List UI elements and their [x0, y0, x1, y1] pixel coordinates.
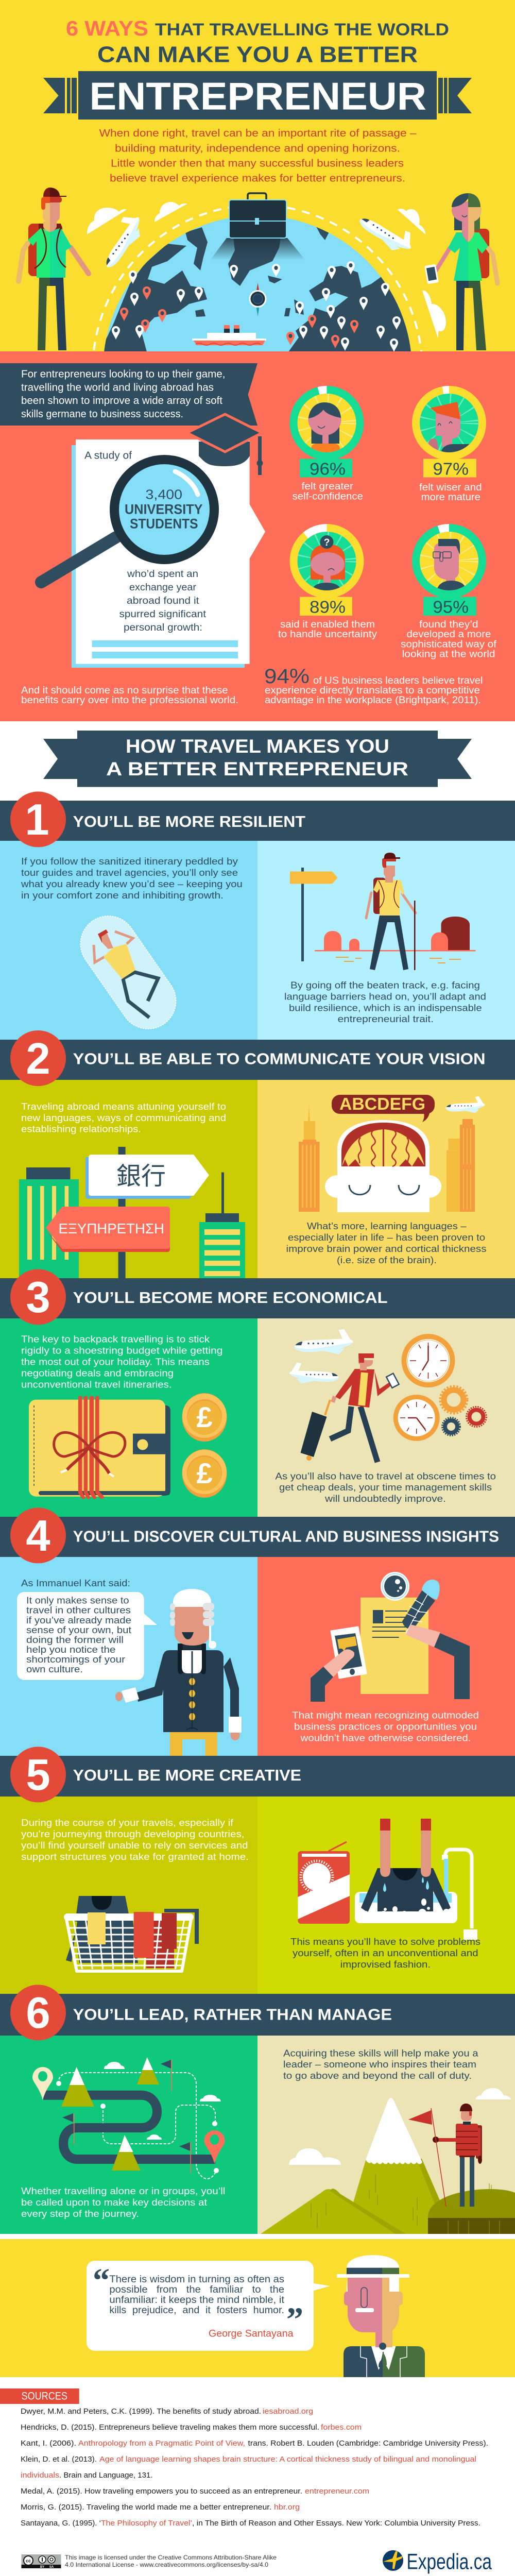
icon: signpost [290, 868, 338, 961]
stat: 89% uncertainty: to handle uncertainty [278, 629, 377, 640]
source list: forbes.com [321, 2423, 362, 2432]
Kant speech bubble [17, 1592, 157, 1680]
source list: hbr.org [274, 2503, 300, 2512]
license text: This image is licensed under the Creative Commons Attribution-Share Alike [65, 2554, 277, 2561]
quote bubble [87, 2261, 330, 2351]
section 5 header: YOU’LL BE MORE CREATIVE [73, 1766, 301, 1784]
flags [62, 2060, 191, 2173]
section 6 right text: Acquiring these skills will help make you a [283, 2048, 479, 2059]
section 6 header [0, 1985, 515, 2040]
Kant speech bubble: shortcomings of your [26, 1654, 125, 1665]
graduation cap [187, 414, 263, 475]
source list: Dwyer, M.M. and Peters, C.K. (1999). The benefits of study abroad. [21, 2407, 261, 2416]
icon: gears [440, 1386, 486, 1435]
section 5 right text [290, 1937, 480, 1970]
globe illustration [16, 188, 500, 351]
title line 1: THAT TRAVELLING THE WORLD [155, 20, 449, 39]
icon: businessman running with suitcase [301, 1353, 399, 1462]
stat: 95% sophisticated [401, 528, 497, 660]
icon: head with brain [325, 1120, 441, 1212]
icon: plane [445, 1096, 485, 1113]
Kant speech bubble: travel in other cultures [26, 1605, 131, 1616]
section 1 right text [284, 980, 486, 1024]
icon: laundry basket [64, 1896, 199, 1971]
section 4: insights [0, 1507, 515, 1756]
Kant intro: As Immanuel Kant said: [21, 1578, 130, 1588]
section 5 left text: you’re journeying through developing countries, [21, 1829, 244, 1839]
flag [408, 2108, 446, 2207]
section 3 header [0, 1269, 515, 1325]
section 6 right text: leader – someone who inspires their team [283, 2059, 476, 2070]
section 3 right text: get cheap deals, your time management skills [279, 1482, 492, 1493]
study paper: abroad found it [127, 596, 199, 606]
section 6 right text: to go above and beyond the call of duty. [283, 2071, 472, 2081]
icon: buildings [19, 1147, 245, 1278]
section 1 left text: in your comfort zone and inhibiting growth. [21, 890, 224, 901]
section 2 header: YOU’LL BE ABLE TO COMMUNICATE YOUR VISION [73, 1050, 486, 1067]
intro paragraph: When done right, travel can be an important rite of passage – [99, 128, 417, 139]
sign: bank in Chinese [85, 1155, 209, 1199]
stat: 96% self-confidence: 96% [310, 460, 346, 478]
section 3 left text: The key to backpack travelling is to stick [21, 1334, 210, 1345]
source list: The Philosophy of Travel’ [101, 2519, 192, 2528]
section 3 left text: unconventional travel itineraries. [21, 1380, 172, 1390]
pins [32, 2067, 225, 2164]
section 4 right text: That might mean recognizing outmoded [292, 1710, 479, 1721]
yellow background [0, 2239, 515, 2377]
Expedia logo [383, 2549, 492, 2574]
section 6 left text: every step of the journey. [21, 2209, 139, 2219]
Kant speech bubble: if you’ve already made [26, 1615, 131, 1625]
source list: iesabroad.org [263, 2407, 313, 2416]
bottom note: benefits carry over into the professional world. [21, 694, 238, 706]
section 5 right text: improvised fashion. [340, 1959, 431, 1970]
icon: hiker [366, 853, 416, 970]
section 1 right text: build resilience, which is an indispensable [289, 1003, 482, 1013]
section 2: communicate [0, 1030, 515, 1278]
stat: 94%: 94% [264, 665, 310, 688]
section 4 panels [0, 1557, 515, 1756]
icon: wallet tied with ribbon [29, 1396, 170, 1499]
intro callout: skills germane to business success. [21, 409, 183, 420]
section 5 left text: support structures you take for granted at home. [21, 1852, 249, 1862]
section 4 header: YOU’LL DISCOVER CULTURAL AND BUSINESS INSIGHTS [73, 1527, 499, 1545]
stat: 96% self-confidence: felt greater [302, 481, 354, 492]
stat: 89% uncertainty: said it enabled them [280, 619, 375, 630]
dashed flight arc [93, 206, 422, 351]
coral background [0, 351, 515, 721]
title line 2: CAN MAKE YOU A BETTER [97, 42, 418, 67]
stat: 95% sophisticated: 95% [433, 598, 469, 616]
icon: planes [289, 1329, 353, 1384]
source list: Kant, I. (2006). [21, 2439, 76, 2448]
section 6 left text: be called upon to make key decisions at [21, 2197, 207, 2208]
source list: Age of language learning shapes brain structure: A cortical thickness study of bilingual and monolingual [99, 2455, 476, 2464]
stat: 95% sophisticated: looking at the world [402, 649, 495, 660]
stat: 97% wiser: more mature [421, 492, 480, 503]
section 5 header: 5 [26, 1751, 50, 1800]
icon: man floating on lilo [70, 905, 187, 1040]
intro paragraph: Little wonder then that many successful business leaders [111, 158, 404, 169]
section 1 header: 1 [25, 795, 49, 844]
study paper: who’d spent an [127, 569, 198, 580]
title line 1 [66, 16, 449, 40]
sign: bank in Chinese: 銀行 [116, 1163, 166, 1190]
section 2 right text: improve brain power and cortical thickness [286, 1244, 486, 1254]
quote bubble: unfamiliar: it keeps the mind nimble, it [109, 2295, 285, 2306]
section 1 left text [21, 856, 243, 901]
quote bubble: There is wisdom in turning as often as [109, 2274, 284, 2285]
section 3 right text: As you’ll also have to travel at obscene times to [275, 1471, 496, 1482]
traveller: man [19, 188, 89, 350]
section 6 header: 6 [26, 1989, 50, 2038]
icon: hands with phone and quill [311, 1572, 470, 1702]
source list: trans. Robert B. Louden (Cambridge: Cambridge University Press). [248, 2439, 488, 2448]
stat: 97% wiser: felt wiser and [419, 482, 482, 493]
bottom note: And it should come as no surprise that these [21, 685, 228, 696]
sources heading: SOURCES [22, 2391, 67, 2402]
source list: entrepreneur.com [305, 2487, 369, 2496]
Kant speech bubble: own culture. [26, 1664, 83, 1674]
stat: 94%: experience directly translates to a competitive [265, 685, 480, 696]
section 3 right text: will undoubtedly improve. [324, 1494, 446, 1504]
icon: speech bubble alphabet [332, 1094, 435, 1122]
source list: Morris, G. (2015). Traveling the world made me a better entrepreneur. [21, 2503, 271, 2512]
stat: 89% uncertainty [278, 528, 377, 640]
section 6 panels [0, 2036, 515, 2234]
stat: 89% uncertainty: ? [324, 537, 330, 548]
section 6 header: YOU’LL LEAD, RATHER THAN MANAGE [73, 2006, 392, 2024]
section 4 right text: wouldn’t have otherwise considered. [300, 1733, 471, 1743]
heading banner: how travel makes you a better entrepreneur: HOW TRAVEL MAKES YOU [126, 736, 389, 757]
planes [93, 205, 418, 272]
compass [249, 283, 267, 316]
section 1 right text: language barriers head on, you’ll adapt and [284, 991, 486, 1002]
creative commons badge: cc [26, 2558, 31, 2564]
quote bubble: George Santayana [209, 2328, 294, 2340]
stat: 95% sophisticated: developed a more [407, 629, 491, 640]
section 2 right text [286, 1221, 486, 1265]
intro paragraph: building maturity, independence and opening horizons. [115, 143, 400, 155]
license text: 4.0 International License - www.creativecommons.org/licenses/by-sa/4.0 [65, 2561, 268, 2568]
Expedia logo: Expedia.ca [407, 2549, 492, 2574]
title banner: entrepreneur: ENTREPRENEUR [90, 74, 426, 117]
section 3: economical [0, 1269, 515, 1517]
section 3 header: YOU’LL BECOME MORE ECONOMICAL [73, 1289, 388, 1307]
section 6 right text [283, 2048, 479, 2081]
source list: Hendricks, D. (2015). Entrepreneurs believe traveling makes them more successful. [21, 2423, 319, 2432]
section 1 left text: tour guides and travel agencies, you’ll only see [21, 868, 238, 878]
section 3 right text [275, 1471, 496, 1504]
section 1 left text: If you follow the sanitized itinerary peddled by [21, 856, 238, 867]
large mountain [344, 2098, 444, 2234]
sign: service in Greek [46, 1207, 170, 1252]
study paper: personal growth: [124, 622, 202, 633]
section 3 panels [0, 1318, 515, 1517]
section 4 header: 4 [26, 1512, 50, 1561]
section 1 left text: what you already knew you’d see – keeping you [21, 879, 243, 889]
stat: 94%: advantage in the workplace (Brightpark, 2011). [265, 694, 481, 706]
hill [428, 2189, 515, 2234]
title line 1: 6 WAYS [66, 16, 148, 40]
source list: Anthropology from a Pragmatic Point of View, [78, 2439, 245, 2448]
section 6: lead [0, 1985, 515, 2234]
briefcase [210, 193, 305, 260]
icon: speech bubble alphabet: ABCDEFG [339, 1094, 425, 1113]
clouds [87, 202, 446, 337]
section 5 header [0, 1747, 515, 1802]
leader figure [433, 2104, 482, 2207]
source list: individuals [21, 2471, 59, 2480]
panel: quote [0, 2239, 515, 2377]
section 3 left text [21, 1334, 222, 1390]
quote bubble: ” [286, 2301, 303, 2338]
source list: Klein, D. et al. (2013). [21, 2455, 97, 2464]
section 2 right text: (i.e. size of the brain). [337, 1255, 437, 1265]
quote bubble: possible from the familiar to the [109, 2284, 284, 2295]
section 3 left text: the most out of your holiday. This means [21, 1357, 210, 1367]
section 2 left text [21, 1101, 226, 1134]
source list: Santayana, G. (1995). ‘ [21, 2519, 101, 2528]
portrait: George Santayana [337, 2255, 425, 2377]
sources heading [0, 2388, 79, 2404]
section 4 header [0, 1507, 515, 1563]
mountains [61, 2057, 159, 2171]
section 1: resilient [0, 791, 515, 1040]
icon: pound coins [182, 1393, 227, 1498]
creative commons badge: BY [40, 2566, 44, 2569]
section 2 right text: What’s more, learning languages – [307, 1221, 467, 1231]
magnifying glass: UNIVERSITY [125, 502, 203, 517]
traveller: woman [424, 193, 497, 350]
stat: 97% wiser: 97% [433, 460, 469, 478]
globe [104, 218, 411, 351]
icon: clocks [393, 1334, 455, 1441]
section 2 right text: especially later in life – has been proven to [288, 1232, 485, 1243]
stat: 89% uncertainty: 89% [310, 598, 346, 616]
section 5 left text: you’ll find yourself unable to rely on services and [21, 1840, 248, 1851]
section 6 left text [21, 2186, 226, 2219]
Kant speech bubble: doing the former will [26, 1635, 124, 1645]
intro callout: been shown to improve a wide array of soft [21, 395, 222, 406]
section 2 header: 2 [26, 1035, 50, 1083]
magnifying glass [41, 460, 214, 582]
quote bubble: “ [93, 2262, 110, 2299]
stat: 94% [264, 665, 483, 706]
icon: mountain scene with leader [261, 2088, 515, 2234]
section 4 right text [292, 1710, 479, 1743]
icon: obstacles [315, 917, 476, 963]
ship [192, 325, 266, 345]
continents [98, 225, 417, 355]
icon: pound coins: £ [196, 1401, 213, 1433]
stat: 95% sophisticated: sophisticated way of [401, 639, 497, 650]
stat: 95% sophisticated: found they’d [419, 619, 478, 630]
intro callout: For entrepreneurs looking to up their game, [21, 369, 226, 380]
icon: city buildings right [299, 1105, 475, 1212]
license text [65, 2554, 277, 2568]
section 2 left text: establishing relationships. [21, 1124, 141, 1134]
section 3 header: 3 [26, 1273, 50, 1322]
intro callout: travelling the world and living abroad has [21, 382, 214, 394]
Kant speech bubble: help you notice the [26, 1645, 115, 1655]
small mountain [261, 2189, 406, 2234]
section 2 header [0, 1030, 515, 1086]
title [43, 16, 472, 120]
source list: , in The Birth of Reason and Other Essays. New York: Columbia University Press. [192, 2519, 480, 2528]
icon: pound coins: £ [196, 1457, 213, 1489]
section 5 right text: This means you’ll have to solve problems [290, 1937, 480, 1947]
study paper: spurred significant [119, 609, 207, 620]
section 3 left text: negotiating deals and embracing [21, 1368, 174, 1379]
stat: 97% wiser [416, 389, 482, 503]
clouds [289, 2088, 511, 2165]
section 5 left text: During the course of your travels, especially if [21, 1818, 234, 1828]
section 2 left text: Traveling abroad means attuning yourself to [21, 1101, 226, 1112]
section 1 header [0, 791, 515, 847]
study paper: exchange year [129, 582, 197, 593]
section 1 right text: By going off the beaten track, e.g. facing [290, 980, 480, 990]
section 5 right text: yourself, often in an unconventional and [293, 1948, 478, 1958]
heading banner: how travel makes you a better entrepreneur [43, 731, 472, 787]
icon: Immanuel Kant [115, 1589, 242, 1756]
magnifying glass: STUDENTS [130, 516, 198, 532]
section 5: creative [0, 1747, 515, 1994]
intro paragraph: believe travel experience makes for better entrepreneurs. [110, 173, 405, 184]
title banner: entrepreneur [43, 71, 472, 120]
icon: washing clothes in sink [298, 1819, 477, 1940]
section 6 left text: Whether travelling alone or in groups, you’ll [21, 2186, 226, 2196]
Kant speech bubble: It only makes sense to [26, 1596, 129, 1606]
quote bubble: kills prejudice, and it fosters humor. [109, 2305, 284, 2316]
section 2 panels [0, 1080, 515, 1278]
icon: map road with mountains [32, 2057, 225, 2179]
heading banner: how travel makes you a better entrepreneur: A BETTER ENTREPRENEUR [106, 758, 408, 779]
map pins [112, 261, 401, 352]
intro paragraph [99, 128, 417, 184]
study paper: A study of [84, 450, 132, 462]
creative commons badge: SA [49, 2566, 54, 2569]
section 5 panels [0, 1797, 515, 1994]
clouds [104, 2062, 221, 2140]
section 3 left text: rigidly to a shoestring budget while getting [21, 1346, 222, 1356]
section 1 panels [0, 841, 515, 1040]
section 5 left text [21, 1818, 249, 1862]
Kant speech bubble: sense of your own, but [26, 1625, 131, 1635]
panel: sources [0, 2388, 492, 2574]
section 1 header: YOU’LL BE MORE RESILIENT [73, 812, 305, 831]
intro callout [0, 363, 258, 426]
section 1 right text: entrepreneurial trait. [338, 1014, 434, 1024]
stat: 96% self-confidence [293, 389, 363, 502]
dashed routes [58, 2073, 216, 2179]
creative commons badge [22, 2554, 61, 2569]
section 4 right text: business practices or opportunities you [294, 1722, 477, 1732]
sign: service in Greek: ΕΞΥΠΗΡΕΤΗΣΗ [59, 1221, 164, 1236]
source list: Medal, A. (2015). How traveling empowers you to succeed as an entrepreneur. [21, 2487, 302, 2496]
stat: 94%: of US business leaders believe travel [313, 675, 483, 686]
magnifying glass: 3,400 [145, 486, 182, 502]
source list: . Brain and Language, 131. [59, 2471, 152, 2480]
stat: 96% self-confidence: self-confidence [293, 492, 363, 502]
road [43, 2095, 215, 2159]
panel: soft skills [0, 351, 515, 721]
study paper [72, 439, 265, 668]
source list [21, 2407, 488, 2528]
section 2 left text: new languages, ways of communicating and [21, 1113, 226, 1123]
background: yellow header [0, 0, 515, 351]
bottom note [21, 685, 238, 706]
